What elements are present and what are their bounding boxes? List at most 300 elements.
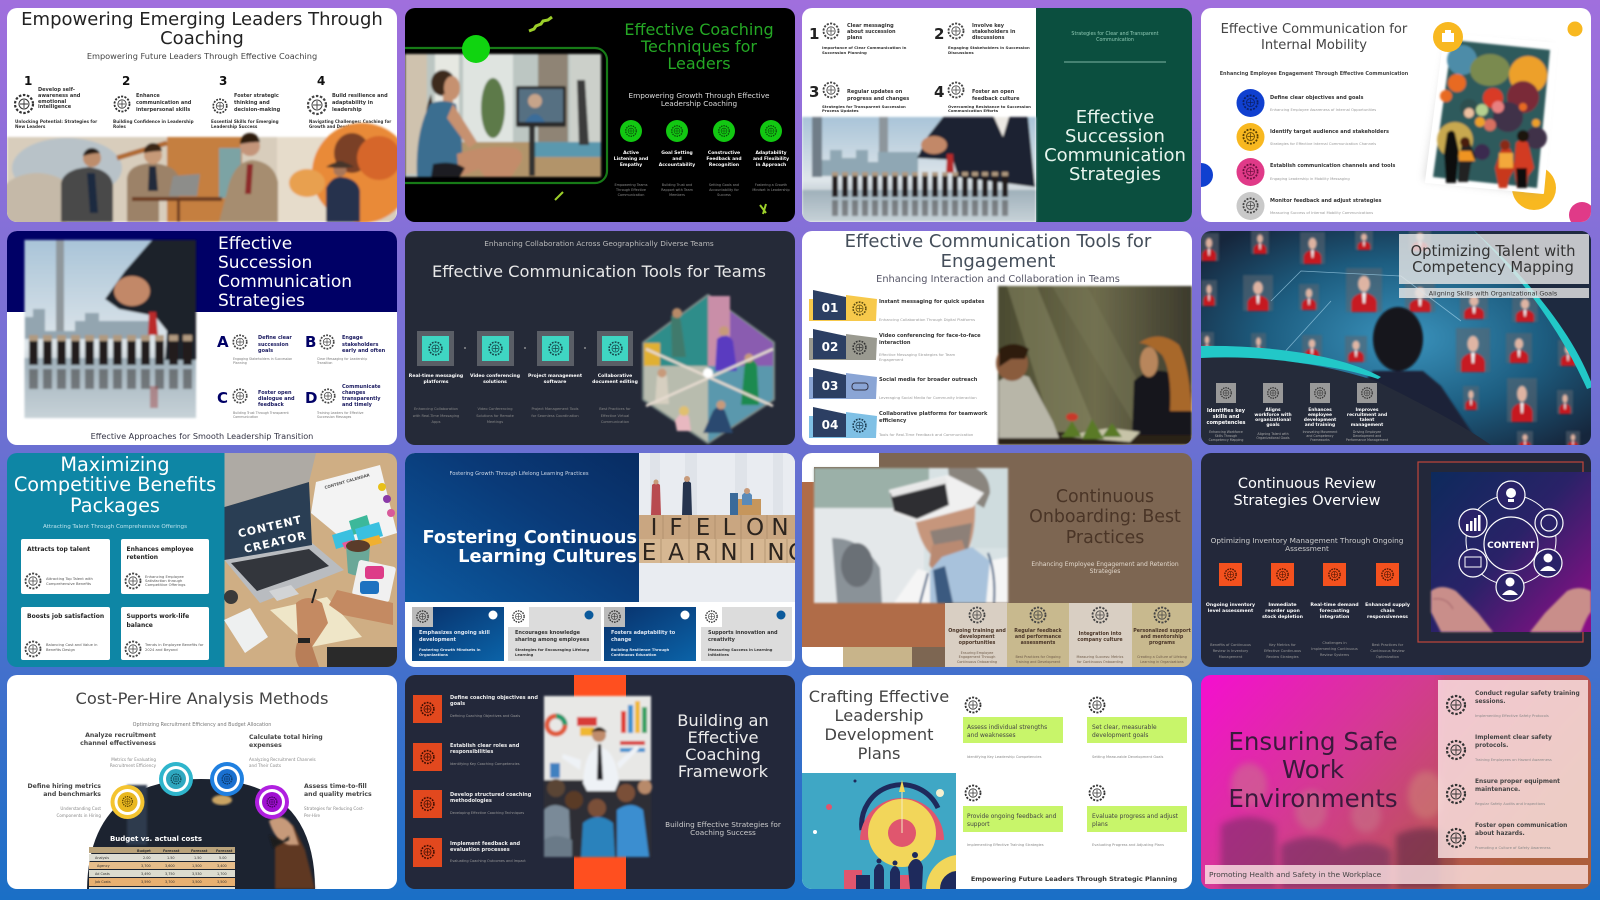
- item 3: Strategies for Transparent Succession: [822, 104, 906, 109]
- tool 4: document editing: [592, 379, 638, 385]
- item 1: Conduct regular safety training: [1475, 691, 1580, 697]
- subtitle: Leadership Coaching: [661, 99, 737, 108]
- title: Leaders: [667, 54, 731, 73]
- step 1: emotional: [38, 99, 67, 105]
- label: define hiring metrics: and benchmarks: [43, 791, 101, 798]
- step 2: [413, 743, 520, 771]
- item 1: Succession Planning: [822, 50, 867, 55]
- item 3: Ensure proper equipment: [1475, 779, 1560, 785]
- photo: wooden letter blocks: N: [767, 540, 785, 566]
- plan item 1: Assess individual strengths: [967, 725, 1047, 731]
- card 2: [508, 607, 601, 661]
- item 2: [1447, 735, 1552, 762]
- budget table: Analysis: [95, 856, 109, 860]
- step 2: 2: [122, 74, 130, 88]
- photo: content cycle in hands: [1431, 472, 1591, 632]
- dark corner: [1474, 231, 1591, 385]
- item 2: [934, 23, 1030, 55]
- item C: C: [217, 389, 228, 407]
- technique 2: Rapport with Team: [661, 188, 694, 192]
- card: supports work-life balance: 2024 and Beyond: [145, 648, 178, 652]
- strategy 3: Real-time demand: [1310, 602, 1359, 608]
- budget table: 3,500: [217, 880, 227, 884]
- hexagon image of team: [644, 296, 773, 442]
- benefit 3: and training: [1305, 422, 1335, 428]
- step 3: methodologies: [450, 798, 492, 804]
- slide: Empowering Emerging Leaders Through Coaching: [0, 8, 412, 233]
- subtitle: Empowering Growth Through Effective: [628, 91, 770, 100]
- photo: wooden letter blocks: E: [696, 515, 710, 541]
- item 1: [1236, 89, 1376, 117]
- title: Internal Mobility: [1261, 38, 1367, 53]
- photo: wooden letter blocks: N: [771, 515, 789, 541]
- card: enhances employee retention: retention: [126, 554, 158, 561]
- step 3: Essential Skills for Emerging: [211, 119, 279, 124]
- slide: Optimizing Talent with Competency Mapping: [1199, 229, 1593, 449]
- label: assess time-to-fill: Per-Hire: [304, 813, 321, 818]
- budget table: Job Costs: [94, 880, 111, 884]
- benefit 1: competencies: [1207, 420, 1246, 426]
- step 3: Develop structured coaching: [450, 792, 532, 798]
- yellow node: [110, 785, 144, 819]
- tool 4: [592, 331, 638, 424]
- row 01: [809, 290, 984, 323]
- step 3: thinking and: [234, 100, 270, 106]
- photo: wooden letter blocks: O: [746, 515, 764, 541]
- card: attracts top talent: [21, 539, 110, 594]
- item C: Communication: [233, 415, 258, 419]
- card 1: Fostering Growth Mindsets in: [419, 648, 481, 652]
- item C: dialogue and: [258, 396, 295, 402]
- technique 4: and Flexibility: [753, 156, 789, 162]
- title: Effective Coaching: [624, 20, 774, 39]
- practice 3: for Continuous Onboarding: [1077, 660, 1123, 664]
- row 03: 03: [822, 379, 838, 393]
- subtitle: Assessment: [1285, 544, 1329, 553]
- item 2: protocols.: [1475, 743, 1508, 749]
- title: Packages: [70, 494, 160, 517]
- step 4: Growth and Development: [309, 124, 367, 129]
- teal swoosh left: [1201, 346, 1381, 379]
- technique 1: Listening and: [614, 156, 648, 162]
- green side panel: [1036, 8, 1192, 222]
- budget table: 3,700: [165, 880, 175, 884]
- budget table: Forecast: [191, 849, 208, 853]
- card: enhances employee retention: Enhancing Employee: [145, 575, 184, 579]
- benefit 4: Performance Management: [1346, 438, 1389, 442]
- practice 1: Ongoing training and: [948, 628, 1006, 634]
- budget table: Forecast: [216, 849, 233, 853]
- practice 1: Engagement Through: [959, 655, 995, 659]
- card 1: [412, 607, 504, 661]
- card 3: [604, 607, 696, 661]
- title: Building an: [677, 711, 769, 730]
- technique 2: and: [672, 156, 682, 162]
- subtitle: Coaching Success: [690, 828, 756, 837]
- strategy 3: Review Systems: [1320, 653, 1349, 657]
- benefit 3: development: [1304, 417, 1336, 423]
- title: Effective Communication for: [1221, 22, 1408, 37]
- slide: Building an Effective Coaching Framework: [405, 675, 795, 889]
- plan item 1: and weaknesses: [967, 733, 1016, 739]
- label: define hiring metrics: Understanding Cost: [60, 806, 101, 811]
- practice 4: [1132, 603, 1192, 667]
- practice 2: Best Practices for Ongoing: [1015, 655, 1061, 659]
- title: Learning Cultures: [458, 546, 637, 567]
- technique 3: [706, 120, 742, 197]
- item 2: 2: [934, 25, 944, 43]
- grid of red-suited figures: [1199, 229, 1580, 449]
- title: Plans: [858, 744, 900, 763]
- title: Framework: [678, 762, 769, 781]
- subtitle: Enhancing Employee Engagement Through Effective Communication: [1220, 71, 1409, 77]
- budget table: 3,700: [141, 864, 151, 868]
- slide: Effective Communication Tools for Teams: [405, 231, 795, 445]
- budget table: 1.50: [194, 856, 202, 860]
- label: assess time-to-fill: Strategies for Reducing Cost-: [304, 806, 364, 811]
- title: Effective: [218, 234, 292, 254]
- label: assess time-to-fill: and quality metrics: [304, 791, 372, 798]
- step 3: [211, 74, 281, 129]
- photo: wooden letter blocks: I: [651, 515, 657, 541]
- strategy 4: Best Practices for: [1372, 643, 1404, 647]
- step 1: 1: [24, 74, 32, 88]
- technique 4: in Approach: [756, 162, 786, 168]
- card: enhances employee retention: [121, 539, 209, 594]
- label: analyze recruitment: [80, 732, 157, 768]
- budget table: Forecast: [163, 849, 180, 853]
- item 4: Foster open communication: [1475, 823, 1567, 829]
- item 4: Measuring Success of Internal Mobility Communications: [1270, 211, 1373, 215]
- slide: Fostering Continuous Learning Cultures: [405, 453, 806, 667]
- item 4: Foster an open: [972, 89, 1015, 95]
- subtitle: Fostering Growth Through Lifelong Learning Practices: [449, 471, 589, 477]
- subtitle: Aligning Skills with Organizational Goals: [1429, 290, 1558, 298]
- item D: Training Leaders for Effective: [316, 411, 364, 415]
- photo: hand picking red figure: [802, 117, 1036, 222]
- network lines: [1271, 271, 1461, 356]
- title: Strategies: [218, 291, 305, 311]
- card: supports work-life balance: Trends in Employee Benefits for: [144, 643, 204, 647]
- budget table: 2.00: [143, 856, 151, 860]
- card 3: Continuous Education: [611, 653, 657, 657]
- item 4: [1236, 192, 1381, 220]
- card 3: Building Resilience Through: [611, 648, 670, 652]
- card 4: [701, 607, 792, 661]
- item 3: Establish communication channels and tools: [1270, 163, 1395, 169]
- item 3: 3: [809, 83, 819, 101]
- card: enhances employee retention: Satisfaction through: [145, 579, 183, 583]
- item 1: Enhancing Employee Awareness of Internal Opportunities: [1270, 108, 1376, 112]
- strategy 1: Ongoing inventory: [1206, 602, 1255, 608]
- card: supports work-life balance: Supports work-life: [126, 613, 189, 620]
- item 3: [1447, 779, 1560, 806]
- row 02: 02: [822, 340, 838, 354]
- plan item 2: [1087, 698, 1187, 759]
- step 2: [113, 74, 194, 129]
- card: enhances employee retention: Competitive Offerings: [145, 583, 186, 587]
- plan item 3: Implementing Effective Training Strategies: [967, 843, 1044, 847]
- practice 2: assessments: [1021, 640, 1056, 646]
- slide: Effective Coaching Techniques for Leaders: [393, 8, 795, 222]
- slide: Effective Succession Communication Strategies (navy): [7, 231, 397, 445]
- budget table: [89, 847, 235, 890]
- card: enhances employee retention: Enhances employee: [126, 546, 194, 553]
- benefit 4: Driving Employee: [1353, 430, 1381, 434]
- technique 4: Adaptability: [755, 150, 787, 156]
- photo: woman on video call: [405, 54, 601, 177]
- photo: wooden letter blocks: F: [669, 515, 683, 541]
- photo: wooden letter blocks: G: [788, 540, 806, 566]
- practice 3: Measuring Success: Metrics: [1077, 655, 1124, 659]
- practice 2: and performance: [1015, 634, 1062, 640]
- title: Continuous: [1056, 487, 1154, 507]
- benefit 4: [1346, 383, 1389, 442]
- row 01: Enhancing Collaboration Through Digital Platforms: [879, 317, 975, 322]
- card 1: development: [419, 637, 457, 643]
- decorative rust block: [802, 482, 945, 647]
- step 4: [308, 74, 391, 129]
- card 4: Initiatives: [708, 653, 730, 657]
- tool 1: Real-time messaging: [409, 373, 463, 379]
- photo: content creator desk: [224, 453, 398, 667]
- strategy 2: [1262, 563, 1303, 659]
- item D: Communicate: [342, 384, 381, 390]
- card: attracts top talent: Attracts top talent: [27, 546, 90, 553]
- title: Effective: [687, 728, 759, 747]
- illustration: four business people: [7, 121, 397, 222]
- benefit 3: Enhances: [1308, 407, 1332, 413]
- title: Empowering Emerging Leaders Through: [21, 9, 383, 30]
- tool 1: [409, 331, 463, 424]
- technique 1: Empathy: [620, 162, 642, 168]
- item 2: Discussions: [948, 50, 974, 55]
- right panel: [1438, 680, 1588, 858]
- budget table: 3,530: [192, 872, 202, 876]
- item 4: Overcoming Resistance to Succession: [948, 104, 1031, 109]
- item 2: Strategies for Effective Internal Communication Channels: [1270, 142, 1376, 146]
- row 04: efficiency: [879, 418, 907, 424]
- cycle ring: [1466, 495, 1556, 585]
- card: supports work-life balance: balance: [126, 622, 153, 629]
- row 02: Effective Messaging Strategies for Team: [879, 352, 956, 357]
- budget table: 3,590: [141, 880, 151, 884]
- row 03: Social media for broader outreach: [879, 377, 978, 383]
- item 1: Clear messaging: [847, 23, 894, 29]
- row 03: Leveraging Social Media for Community Interaction: [879, 395, 977, 400]
- slide: Continuous Onboarding: Best Practices: [802, 453, 1192, 667]
- step 4: leadership: [332, 107, 362, 113]
- card 3: change: [611, 637, 632, 643]
- title: Strategies Overview: [1234, 493, 1381, 509]
- plan item 4: [1087, 786, 1187, 847]
- teal node: [159, 762, 193, 796]
- title: Communication: [218, 272, 352, 292]
- blurred people photo overlay: [1221, 675, 1591, 889]
- item 2: Engaging Stakeholders in Succession: [948, 45, 1030, 50]
- node glyphs: [1465, 488, 1557, 595]
- subtitle: Enhancing Interaction and Collaboration in Teams: [876, 274, 1120, 285]
- plan item 3: Provide ongoing feedback and: [967, 814, 1057, 820]
- decorative bottom blocks: [802, 647, 945, 667]
- item 1: plans: [847, 35, 862, 41]
- step 4: Implement feedback and: [450, 841, 520, 847]
- magenta background: [1201, 675, 1591, 889]
- step 4: adaptability in: [332, 100, 373, 106]
- title: Fostering Continuous: [422, 527, 637, 548]
- subtitle: Enhancing Collaboration Across Geographically Diverse Teams: [484, 239, 714, 248]
- step 1: Unlocking Potential: Strategies for: [15, 119, 98, 124]
- slide: Maximizing Competitive Benefits Packages: [7, 453, 398, 667]
- practice 2: Training and Development: [1015, 660, 1061, 664]
- item A: [217, 333, 292, 365]
- row 04: 04: [822, 418, 838, 432]
- step 1: [413, 695, 538, 723]
- label: calculate total hiring: and Their Costs: [249, 763, 281, 768]
- card: attracts top talent: Attracting Top Talent with: [46, 577, 93, 581]
- strategy 3: integration: [1320, 614, 1349, 620]
- row 02: Video conferencing for face-to-face: [879, 333, 981, 339]
- plan item 2: Setting Measurable Development Goals: [1092, 755, 1164, 759]
- row 01: 01: [822, 301, 838, 315]
- title: Onboarding: Best: [1029, 507, 1181, 527]
- photo: wooden letter blocks: [639, 453, 806, 602]
- budget table: 3,490: [141, 872, 151, 876]
- tool 2: Solutions for Remote: [476, 414, 515, 418]
- plan item 4: plans: [1092, 822, 1108, 828]
- photo: wooden letter blocks: A: [668, 540, 684, 566]
- label: define hiring metrics: [28, 783, 101, 818]
- item A: Engaging Stakeholders in Succession: [233, 357, 292, 361]
- tool 4: Collaborative: [598, 373, 632, 379]
- row 03: [809, 368, 978, 401]
- benefit 2: Aligning Talent with: [1257, 432, 1289, 436]
- budget table: 3,750: [165, 872, 175, 876]
- technique 3: Setting Goals and: [709, 183, 739, 187]
- card shadow: [1423, 40, 1551, 194]
- title: Cost-Per-Hire Analysis Methods: [76, 689, 328, 708]
- subtitle: Building Effective Strategies for: [665, 820, 781, 829]
- technique 3: Constructive: [708, 150, 740, 156]
- card: boosts job satisfaction: [21, 607, 110, 660]
- item 3: [809, 82, 909, 113]
- item 3: maintenance.: [1475, 787, 1520, 793]
- step 2: Identifying Key Coaching Competencies: [450, 762, 520, 766]
- title: Effective Communication Tools for: [845, 231, 1152, 252]
- benefit 4: Development and: [1353, 434, 1381, 438]
- photo: coach at whiteboard: [544, 696, 652, 857]
- title: Engagement: [941, 251, 1055, 272]
- subtitle: Enhancing Employee Engagement and Retention: [1031, 561, 1179, 568]
- panel title: Effective: [1076, 107, 1154, 128]
- item 3: progress and changes: [847, 96, 909, 102]
- title: Coaching: [685, 745, 761, 764]
- title: Ensuring Safe: [1228, 727, 1398, 756]
- step 4: Navigating Challenges: Coaching for: [309, 119, 391, 124]
- item 4: 4: [934, 83, 944, 101]
- card: supports work-life balance: [121, 607, 209, 660]
- center label: CONTENT: [1487, 541, 1536, 551]
- card 2: Learning: [515, 653, 534, 657]
- label: calculate total hiring: Analyzing Recruitment Channels: [249, 757, 316, 762]
- item 2: Training Employees on Hazard Awareness: [1474, 758, 1552, 762]
- panel title: Strategies: [1069, 164, 1161, 185]
- tool 2: Video conferencing: [470, 373, 520, 379]
- tool 2: Meetings: [487, 420, 503, 424]
- man with glasses: [269, 835, 289, 848]
- title: Leadership: [835, 706, 923, 725]
- row 04: Collaborative platforms for teamwork: [879, 411, 988, 417]
- title: Succession: [218, 253, 312, 273]
- tool 3: Project management: [528, 373, 583, 379]
- practice 4: Creating a Culture of Lifelong: [1137, 655, 1187, 659]
- technique 2: Goal Setting: [661, 150, 693, 156]
- title: Techniques for: [640, 37, 757, 56]
- technique 1: Communication: [618, 193, 644, 197]
- step 3: [413, 790, 532, 818]
- subtitle: Strategies: [1090, 568, 1120, 575]
- label: define hiring metrics: Define hiring metrics: [28, 783, 101, 790]
- title: Competitive Benefits: [14, 473, 216, 496]
- technique 3: Success: [717, 193, 731, 197]
- technique 3: Recognition: [709, 162, 739, 168]
- step 2: Building Confidence in Leadership: [113, 119, 194, 124]
- slide: Effective Succession Communication Strategies (green): [802, 8, 1192, 222]
- item 1: [1447, 691, 1580, 718]
- card: attracts top talent: Comprehensive Benefits: [46, 582, 91, 586]
- title: Maximizing: [60, 453, 170, 476]
- label: calculate total hiring: [249, 734, 323, 768]
- label: analyze recruitment: Metrics for Evaluating: [111, 757, 156, 762]
- purple node: [255, 785, 289, 819]
- row 02: [809, 329, 981, 362]
- budget table: Ad Costs: [95, 872, 110, 876]
- step 4: Evaluating Coaching Outcomes and Impact: [450, 859, 526, 863]
- slide: Cost-Per-Hire Analysis Methods: [7, 675, 397, 890]
- item 4: [934, 82, 1031, 113]
- practice 4: Learning in Organizations: [1140, 660, 1184, 664]
- row 04: [809, 407, 988, 440]
- item 3: [1236, 158, 1395, 186]
- dark arch image: [87, 779, 315, 889]
- strategy 1: Benefits of Continuous: [1210, 643, 1251, 647]
- benefit 1: Enhancing Workforce: [1209, 430, 1243, 434]
- title: Optimizing Talent with: [1411, 243, 1575, 260]
- strategy 4: Enhanced supply: [1365, 602, 1410, 608]
- arch label: Budget vs. actual costs: [110, 835, 202, 843]
- benefit 4: Improves: [1356, 407, 1379, 413]
- label: analyze recruitment: Recruitment Efficiency: [110, 763, 157, 768]
- item 2: stakeholders in: [972, 29, 1016, 35]
- navy curved panel: [1201, 357, 1491, 445]
- item 4: about hazards.: [1475, 831, 1525, 837]
- item 1: Define clear objectives and goals: [1270, 95, 1363, 101]
- benefit 1: Identifies key: [1207, 408, 1246, 414]
- title: Effective Communication Tools for Teams: [432, 262, 766, 281]
- plan item 2: development goals: [1092, 733, 1148, 739]
- practice 1: development: [959, 634, 995, 640]
- subtitle: Empowering Future Leaders Through Effective Coaching: [87, 51, 317, 61]
- blue header panel: [405, 453, 639, 602]
- item 2: Involve key: [972, 23, 1005, 29]
- subtitle: Optimizing Recruitment Efficiency and Budget Allocation: [133, 722, 271, 728]
- panel divider: [1064, 62, 1166, 63]
- technique 4: Fostering a Growth: [755, 183, 787, 187]
- benefit 4: management: [1351, 422, 1383, 428]
- bottom banner: [1205, 865, 1588, 884]
- item 1: 1: [809, 25, 819, 43]
- step 2: communication and: [136, 100, 192, 106]
